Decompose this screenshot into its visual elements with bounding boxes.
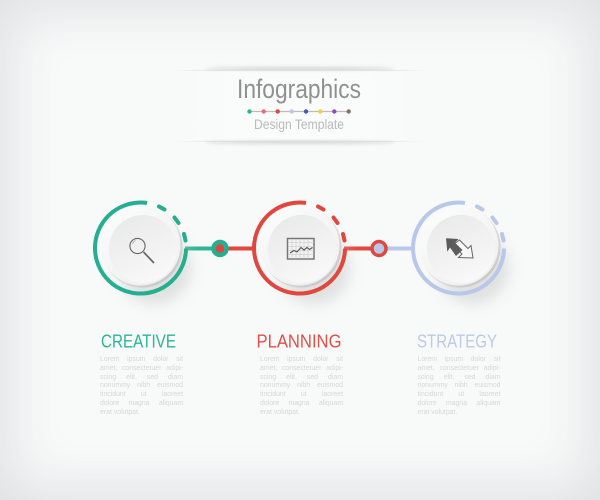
step 1: creative circle: [95, 203, 191, 304]
text block: planning: tincidunt ut laoreet: [260, 391, 343, 398]
text block: strategy: Lorem ipsum dolor sit: [418, 356, 500, 363]
text block: strategy: nonummy nibh euismod: [418, 382, 500, 389]
step 2: planning circle: [254, 203, 350, 304]
title: Infographics: [237, 74, 361, 104]
text block: strategy: erat volutpat.: [418, 409, 457, 416]
text block: creative: Lorem ipsum dolor sit: [100, 356, 183, 363]
icon: magnifier: [130, 238, 154, 263]
text block: planning: amet, consectetuer adipi-: [260, 365, 343, 372]
text block: planning: scing elit, sed diam: [260, 374, 343, 381]
colored dot line: [247, 109, 351, 114]
drop shadow: [119, 232, 191, 304]
text block: strategy: scing elit, sed diam: [418, 374, 500, 381]
ring: [413, 203, 504, 294]
text block: creative: amet, consectetuer adipi-: [100, 365, 183, 372]
node: blue center on red: [372, 242, 386, 256]
text block: creative: dolore magna aliquam: [100, 400, 183, 407]
text block: planning: nonummy nibh euismod: [260, 382, 343, 389]
step 3: strategy circle: [413, 203, 509, 304]
heading: strategy: STRATEGY: [417, 330, 497, 352]
icon: line chart: [288, 238, 314, 259]
node: red center on teal: [214, 242, 226, 255]
ring: [254, 203, 345, 294]
text block: creative: nonummy nibh euismod: [100, 382, 183, 389]
text block: planning: dolore magna aliquam: [260, 400, 343, 407]
text block: strategy: dolore magna aliquam: [418, 400, 500, 407]
text block: creative: erat volutpat.: [100, 409, 140, 416]
text block: strategy: tincidunt ut laoreet: [418, 391, 500, 398]
text block: creative: tincidunt ut laoreet: [100, 391, 183, 398]
connector: red from node to planning: [226, 246, 254, 250]
text block: strategy: [418, 356, 500, 416]
text block: planning: erat volutpat.: [260, 409, 300, 416]
connector: red to node: [344, 246, 373, 250]
disc: [418, 206, 500, 288]
subtitle: Design Template: [254, 116, 344, 132]
text block: creative: [100, 356, 183, 416]
heading: planning: PLANNING: [256, 330, 342, 352]
bottom fold shadow: [175, 141, 425, 144]
drop shadow: [278, 232, 350, 304]
ring: [95, 203, 186, 294]
text block: creative: scing elit, sed diam: [100, 374, 183, 381]
text block: strategy: amet, consectetuer adipi-: [418, 365, 500, 372]
connector: blue from node to strategy: [385, 246, 413, 250]
text block: planning: [260, 356, 343, 416]
connector: teal to node: [185, 246, 214, 250]
icon: diagonal arrows: [446, 238, 473, 258]
disc: [100, 206, 182, 288]
top fold shadow: [175, 67, 425, 71]
disc: [260, 206, 342, 288]
text block: planning: Lorem ipsum dolor sit: [260, 356, 343, 363]
drop shadow: [437, 232, 509, 304]
heading: creative: CREATIVE: [101, 330, 176, 352]
title panel: [175, 67, 425, 144]
